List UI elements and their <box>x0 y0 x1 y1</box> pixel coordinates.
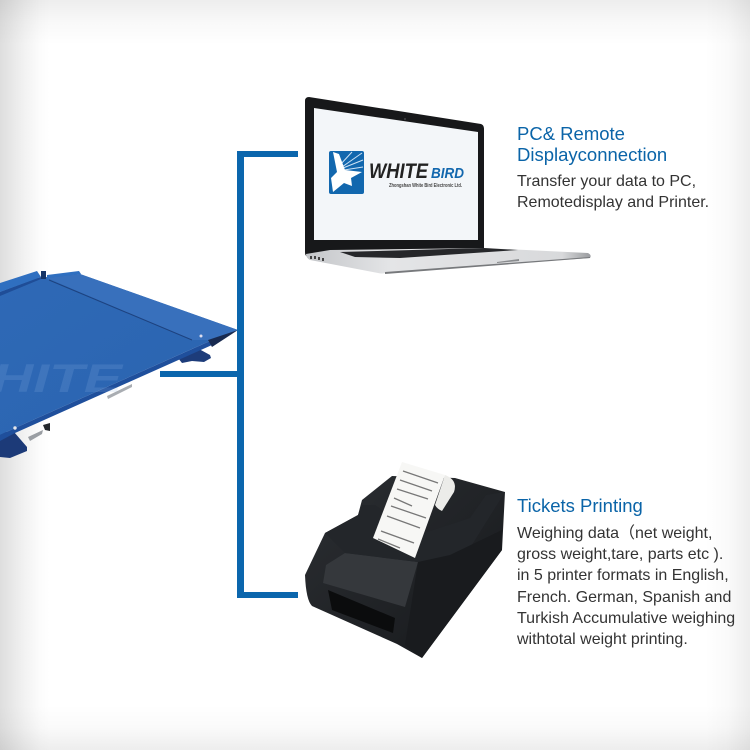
logo: white bird: WHITE <box>369 160 429 183</box>
heading: PC and remote display: PC& Remote <box>517 123 625 144</box>
printer body <box>305 476 505 658</box>
laptop lid <box>305 97 484 256</box>
laptop base <box>306 248 591 274</box>
text: printing description: gross weight,tare, parts etc ). <box>517 546 723 563</box>
text: printing description: withtotal weight printing. <box>517 631 688 648</box>
side panel <box>405 530 502 658</box>
text: printing description: Weighing data（net weight, <box>517 525 712 542</box>
text: printing description: French. German, Spanish and <box>517 589 731 606</box>
laptop screen <box>314 108 478 240</box>
logo: white bird: BIRD <box>431 165 464 182</box>
heading: PC and remote display: Displayconnection <box>517 144 667 165</box>
heading: PC and remote display <box>517 123 667 165</box>
printer top cover <box>325 492 505 566</box>
logo: white bird <box>329 151 464 194</box>
receipt paper <box>373 462 455 558</box>
plate top <box>0 274 238 435</box>
text: PC description: Remotedisplay and Printer. <box>517 194 709 211</box>
printer front cover <box>323 553 418 607</box>
logo: white bird: Zhongshan White Bird Electronic Ltd. <box>389 183 462 189</box>
text: PC description: Transfer your data to PC, <box>517 173 696 190</box>
heading: tickets printing: Tickets Printing <box>517 495 643 516</box>
side rail <box>0 271 81 296</box>
paper slot <box>328 590 395 633</box>
ramp panel <box>47 274 238 340</box>
text: printing description <box>517 524 735 648</box>
text: printing description: Turkish Accumulative weighing <box>517 610 735 627</box>
text: PC description <box>517 173 709 211</box>
text: printing description: in 5 printer formats in English, <box>517 567 729 584</box>
front edge <box>0 341 212 441</box>
feet <box>178 349 211 363</box>
